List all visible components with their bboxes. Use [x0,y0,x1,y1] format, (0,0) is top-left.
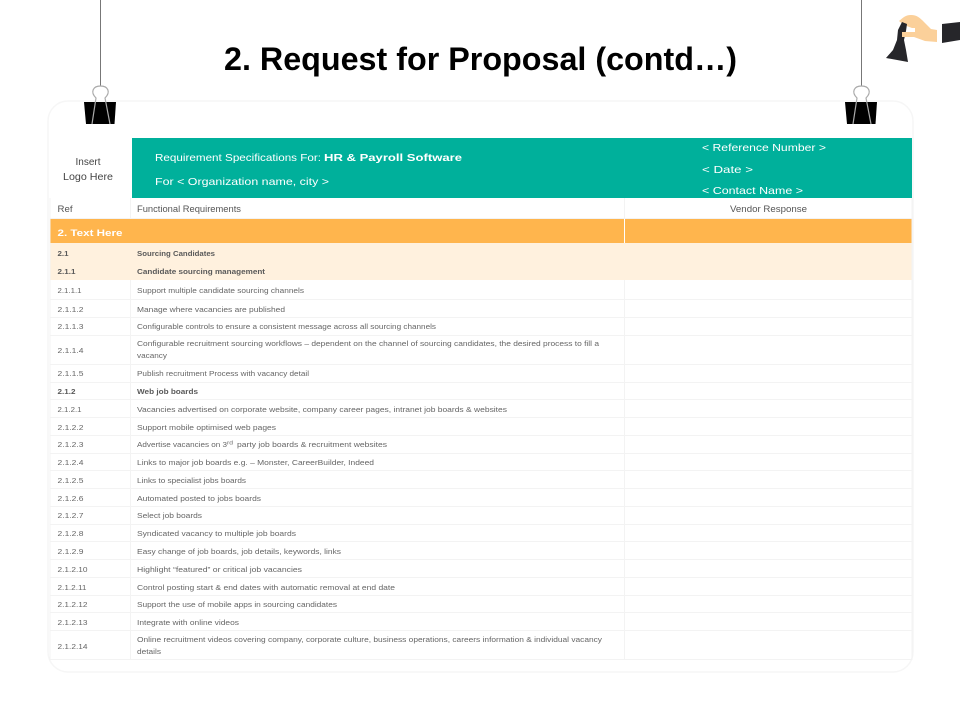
reference numbers [58,286,88,651]
teal header banner [132,138,912,198]
functional requirements: Support mobile optimised web pages [137,423,276,432]
peach subsection rows: Sourcing Candidates [137,249,215,258]
functional requirements: Highlight “featured” or critical job vacancies [137,565,302,574]
logo placeholder: Logo Here [63,171,113,183]
reference numbers: 2.1.2.11 [58,583,86,592]
functional requirements: Configurable controls to ensure a consistent message across all sourcing channels [137,322,436,331]
functional requirements: party job boards & recruitment websites [237,440,387,449]
functional requirements: Advertise vacancies on 3 [137,440,227,449]
reference numbers: 2.1.2.10 [58,565,88,574]
reference numbers: 2.1.2.2 [58,423,84,432]
functional requirements: details [137,647,161,656]
panel: card [48,101,913,672]
functional requirements: Vacancies advertised on corporate website, company career pages, intranet job boards & websites [137,405,507,414]
functional requirements: Support multiple candidate sourcing channels [137,286,304,295]
reference numbers: 2.1.2.12 [58,600,88,609]
reference numbers: 2.1.2.6 [58,494,84,503]
peach subsection rows [50,243,912,280]
reference numbers: 2.1.2.9 [58,547,84,556]
peach subsection rows: Candidate sourcing management [137,267,266,276]
software name: HR & Payroll Software [324,152,462,164]
logo placeholder: Insert [76,156,101,168]
reference numbers: 2.1.2.5 [58,476,84,485]
contact name: < Contact Name > [702,185,803,197]
reference numbers: 2.1.2.7 [58,511,84,520]
logo placeholder [63,156,113,183]
functional requirements: rd [227,440,233,446]
functional requirements: Publish recruitment Process with vacancy detail [137,369,309,378]
requirement specification text: Requirement Specifications For: [155,152,321,164]
column headers: Ref [58,204,73,214]
reference numbers: 2.1.1.1 [58,286,82,295]
functional requirements: Configurable recruitment sourcing workflows – dependent on the channel of sourcing candidates, the desired process to fill a [137,339,600,348]
peach subsection rows: 2.1 [58,249,68,258]
reference numbers: 2.1.2.14 [58,642,88,651]
icon: left binder clip [84,0,116,124]
peach subsection rows: 2.1.1 [58,267,76,276]
reference numbers: 2.1.1.3 [58,322,84,331]
column headers [58,204,807,214]
functional requirements: Links to major job boards e.g. – Monster, CareerBuilder, Indeed [137,458,374,467]
reference numbers: 2.1.2.3 [58,440,84,449]
icon: right binder clip [845,0,877,124]
reference numbers: 2.1.2.13 [58,618,88,627]
functional requirements: Online recruitment videos covering company, corporate culture, business operations, careers information & individual vacancy [137,635,602,644]
functional requirements: Select job boards [137,511,202,520]
functional requirements: Control posting start & end dates with automatic removal at end date [137,583,395,592]
functional requirements: Integrate with online videos [137,618,239,627]
functional requirements: Support the use of mobile apps in sourcing candidates [137,600,337,609]
functional requirements: Automated posted to jobs boards [137,494,261,503]
reference number: < Reference Number > [702,142,826,154]
functional requirements: Manage where vacancies are published [137,305,285,314]
functional requirements: Web job boards [137,387,198,396]
title: 2. Request for Proposal (contd…) [224,41,737,77]
organization text: For < Organization name, city > [155,176,329,188]
functional requirements: Easy change of job boards, job details, keywords, links [137,547,341,556]
reference numbers: 2.1.1.2 [58,305,84,314]
table grid lines [50,198,912,660]
functional requirements: vacancy [137,351,167,360]
reference numbers: 2.1.2.8 [58,529,84,538]
orange section row: 2. Text Here [58,228,122,239]
reference numbers: 2.1.2.1 [58,405,82,414]
column headers: Vendor Response [730,204,807,214]
orange section row [50,218,912,243]
functional requirements: Syndicated vacancy to multiple job boards [137,529,296,538]
reference numbers: 2.1.1.4 [58,346,84,355]
icon: hand holding chess piece [886,15,960,62]
column headers: Functional Requirements [137,204,242,214]
reference numbers: 2.1.1.5 [58,369,84,378]
reference numbers: 2.1.2.4 [58,458,84,467]
date: < Date > [702,164,753,176]
functional requirements [137,286,602,656]
reference numbers: 2.1.2 [58,387,76,396]
functional requirements: Links to specialist jobs boards [137,476,246,485]
table rows [58,286,602,656]
